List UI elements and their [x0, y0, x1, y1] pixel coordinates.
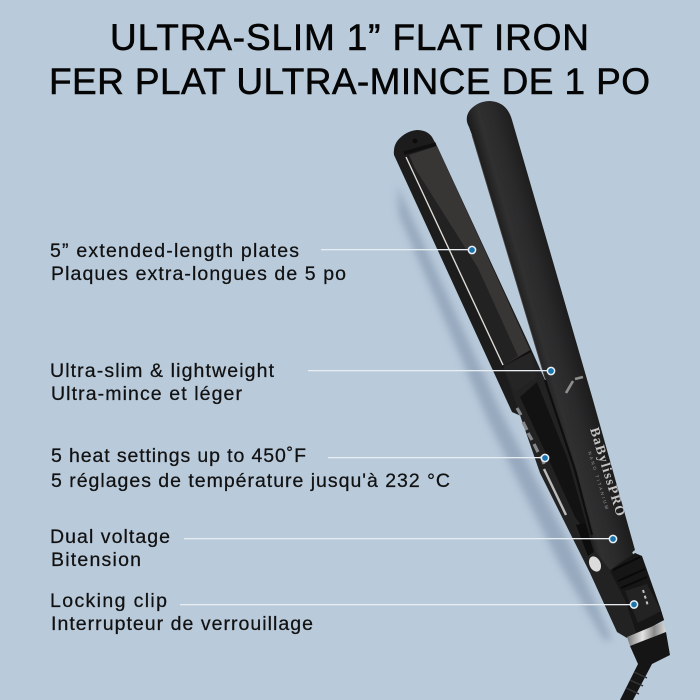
callout: heat settings: 5 heat settings up to 450˚F — [51, 445, 306, 467]
plate — [409, 146, 530, 366]
body — [503, 352, 664, 638]
brand text: BaBylissPRO — [587, 425, 628, 518]
model text: NANO TITANIUM — [587, 451, 609, 510]
callout: ultra-slim: Ultra-mince et léger — [51, 383, 242, 405]
callout: ultra-slim — [50, 360, 555, 405]
callout: locking clip: Interrupteur de verrouillage — [51, 613, 313, 635]
callout: locking clip: Locking clip — [50, 590, 167, 612]
dark center panel — [520, 382, 590, 537]
arm seam — [545, 380, 592, 535]
heat setting buttons — [517, 408, 544, 464]
upper arm — [467, 101, 635, 570]
callout: dual voltage: Dual voltage — [50, 526, 170, 548]
locking clip — [610, 553, 664, 635]
callout: heat settings — [51, 445, 549, 492]
shadow — [397, 185, 612, 640]
hinge piece — [503, 353, 537, 392]
callout: dual voltage: Bitension — [51, 549, 141, 571]
metal ring — [627, 622, 666, 646]
chevron marks — [566, 377, 583, 393]
callout: dual voltage — [50, 526, 617, 571]
callout: extended-length plates — [50, 240, 476, 285]
slider bar — [544, 469, 566, 515]
swivel and cord — [620, 632, 670, 700]
arm edge — [472, 135, 545, 378]
title: ULTRA-SLIM 1” FLAT IRON — [110, 17, 589, 58]
callout: locking clip — [50, 590, 638, 635]
lower arm — [394, 130, 545, 420]
flat iron illustration — [394, 101, 670, 700]
callout: extended-length plates: 5” extended-length plates — [50, 240, 299, 262]
title — [49, 17, 650, 102]
title: FER PLAT ULTRA-MINCE DE 1 PO — [49, 61, 650, 102]
callout: heat settings: 5 réglages de température jusqu'à 232 °C — [51, 470, 450, 492]
callout: ultra-slim: Ultra-slim & lightweight — [50, 360, 275, 382]
power button — [587, 554, 603, 574]
callout: extended-length plates: Plaques extra-longues de 5 po — [51, 263, 346, 285]
switch slot — [576, 523, 594, 556]
